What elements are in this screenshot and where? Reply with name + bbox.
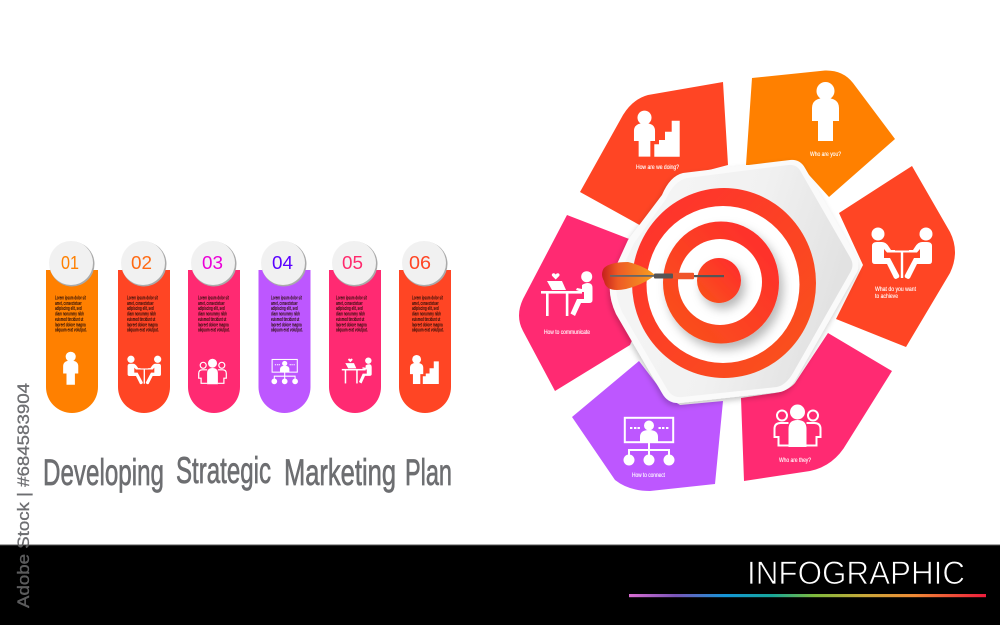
card 02: amet, consectetuer	[127, 301, 154, 307]
title	[43, 450, 452, 493]
segment: what do you want to achieve: What do you want	[875, 286, 916, 293]
card 04: diam nonummy nibh	[271, 312, 300, 318]
footer bar	[0, 544, 1000, 625]
card 06: aliquam erat volutpat.	[412, 328, 444, 334]
card 06: diam nonummy nibh	[412, 312, 441, 318]
card 03: amet, consectetuer	[198, 301, 225, 307]
card 02: adipiscing elit, sed	[127, 306, 154, 312]
card 06: laoreet dolore magna	[412, 322, 443, 328]
target rings	[632, 188, 816, 378]
card 04	[258, 241, 310, 413]
card 04: laoreet dolore magna	[271, 322, 302, 328]
card 03	[188, 241, 240, 413]
card 05: diam nonummy nibh	[336, 312, 365, 318]
card 01: 01	[61, 252, 79, 273]
segment: who are you	[746, 70, 895, 197]
infographic label: INFOGRAPHIC	[747, 555, 965, 591]
card 03: adipiscing elit, sed	[198, 306, 225, 312]
panel: step cards	[46, 241, 451, 413]
card 03: euismod tincidunt ut	[198, 317, 226, 323]
card 03: Lorem ipsum dolor sit	[198, 296, 229, 302]
card 05: aliquam erat volutpat.	[336, 328, 368, 334]
title: Developing	[43, 452, 164, 493]
card 04: Lorem ipsum dolor sit	[271, 296, 302, 302]
card 02: Lorem ipsum dolor sit	[127, 296, 158, 302]
segment: who are they: Who are they?	[779, 457, 811, 464]
card 05	[329, 241, 381, 413]
card 06: euismod tincidunt ut	[412, 317, 440, 323]
card 05: Lorem ipsum dolor sit	[336, 296, 367, 302]
segment: how to communicate	[519, 215, 650, 391]
card 03: aliquam erat volutpat.	[198, 328, 230, 334]
panel: target board	[602, 160, 858, 403]
card 04: adipiscing elit, sed	[271, 306, 298, 312]
card 04: aliquam erat volutpat.	[271, 328, 303, 334]
card 05: adipiscing elit, sed	[336, 306, 363, 312]
card 04: amet, consectetuer	[271, 301, 298, 307]
hexagon plate	[610, 160, 858, 403]
card 02	[118, 241, 170, 413]
segment: what do you want to achieve	[836, 166, 955, 347]
title: Plan	[405, 452, 452, 493]
card 02: euismod tincidunt ut	[127, 317, 155, 323]
card 01	[46, 241, 98, 413]
card 01: Lorem ipsum dolor sit	[55, 296, 86, 302]
segment: who are you: Who are you?	[810, 151, 841, 158]
segment: who are they	[741, 333, 892, 481]
segment: how to connect	[572, 361, 723, 491]
segment: how to connect: How to connect	[632, 472, 665, 479]
segment: what do you want to achieve: to achieve	[875, 293, 898, 300]
card 02: laoreet dolore magna	[127, 322, 158, 328]
card 04: 04	[272, 252, 293, 273]
card 06: amet, consectetuer	[412, 301, 439, 307]
rainbow line	[629, 594, 986, 597]
vertical stock id text: Adobe Stock | #684583904	[14, 383, 33, 608]
card 02: 02	[131, 252, 152, 273]
card 03: diam nonummy nibh	[198, 312, 227, 318]
card 01: amet, consectetuer	[55, 301, 82, 307]
card 03: laoreet dolore magna	[198, 322, 229, 328]
card 04: euismod tincidunt ut	[271, 317, 299, 323]
title: Marketing	[284, 452, 396, 493]
card 05: euismod tincidunt ut	[336, 317, 364, 323]
card 01: adipiscing elit, sed	[55, 306, 82, 312]
card 03: 03	[202, 252, 223, 273]
card 05: 05	[342, 252, 363, 273]
card 05: amet, consectetuer	[336, 301, 363, 307]
card 06: adipiscing elit, sed	[412, 306, 439, 312]
card 01: aliquam erat volutpat.	[55, 328, 87, 334]
card 06: Lorem ipsum dolor sit	[412, 296, 443, 302]
title: Strategic	[176, 450, 271, 491]
card 01: laoreet dolore magna	[55, 322, 86, 328]
card 06: 06	[409, 252, 431, 273]
segment: how to communicate: How to communicate	[544, 329, 590, 336]
dart	[602, 262, 724, 290]
card 02: diam nonummy nibh	[127, 312, 156, 318]
panel: hexagon segments	[519, 70, 955, 491]
card 05: laoreet dolore magna	[336, 322, 367, 328]
card 01: diam nonummy nibh	[55, 312, 84, 318]
card 01: euismod tincidunt ut	[55, 317, 83, 323]
card 06	[399, 241, 451, 413]
segment: how are we doing	[580, 82, 728, 228]
card 02: aliquam erat volutpat.	[127, 328, 159, 334]
segment: how are we doing: How are we doing?	[636, 164, 679, 171]
